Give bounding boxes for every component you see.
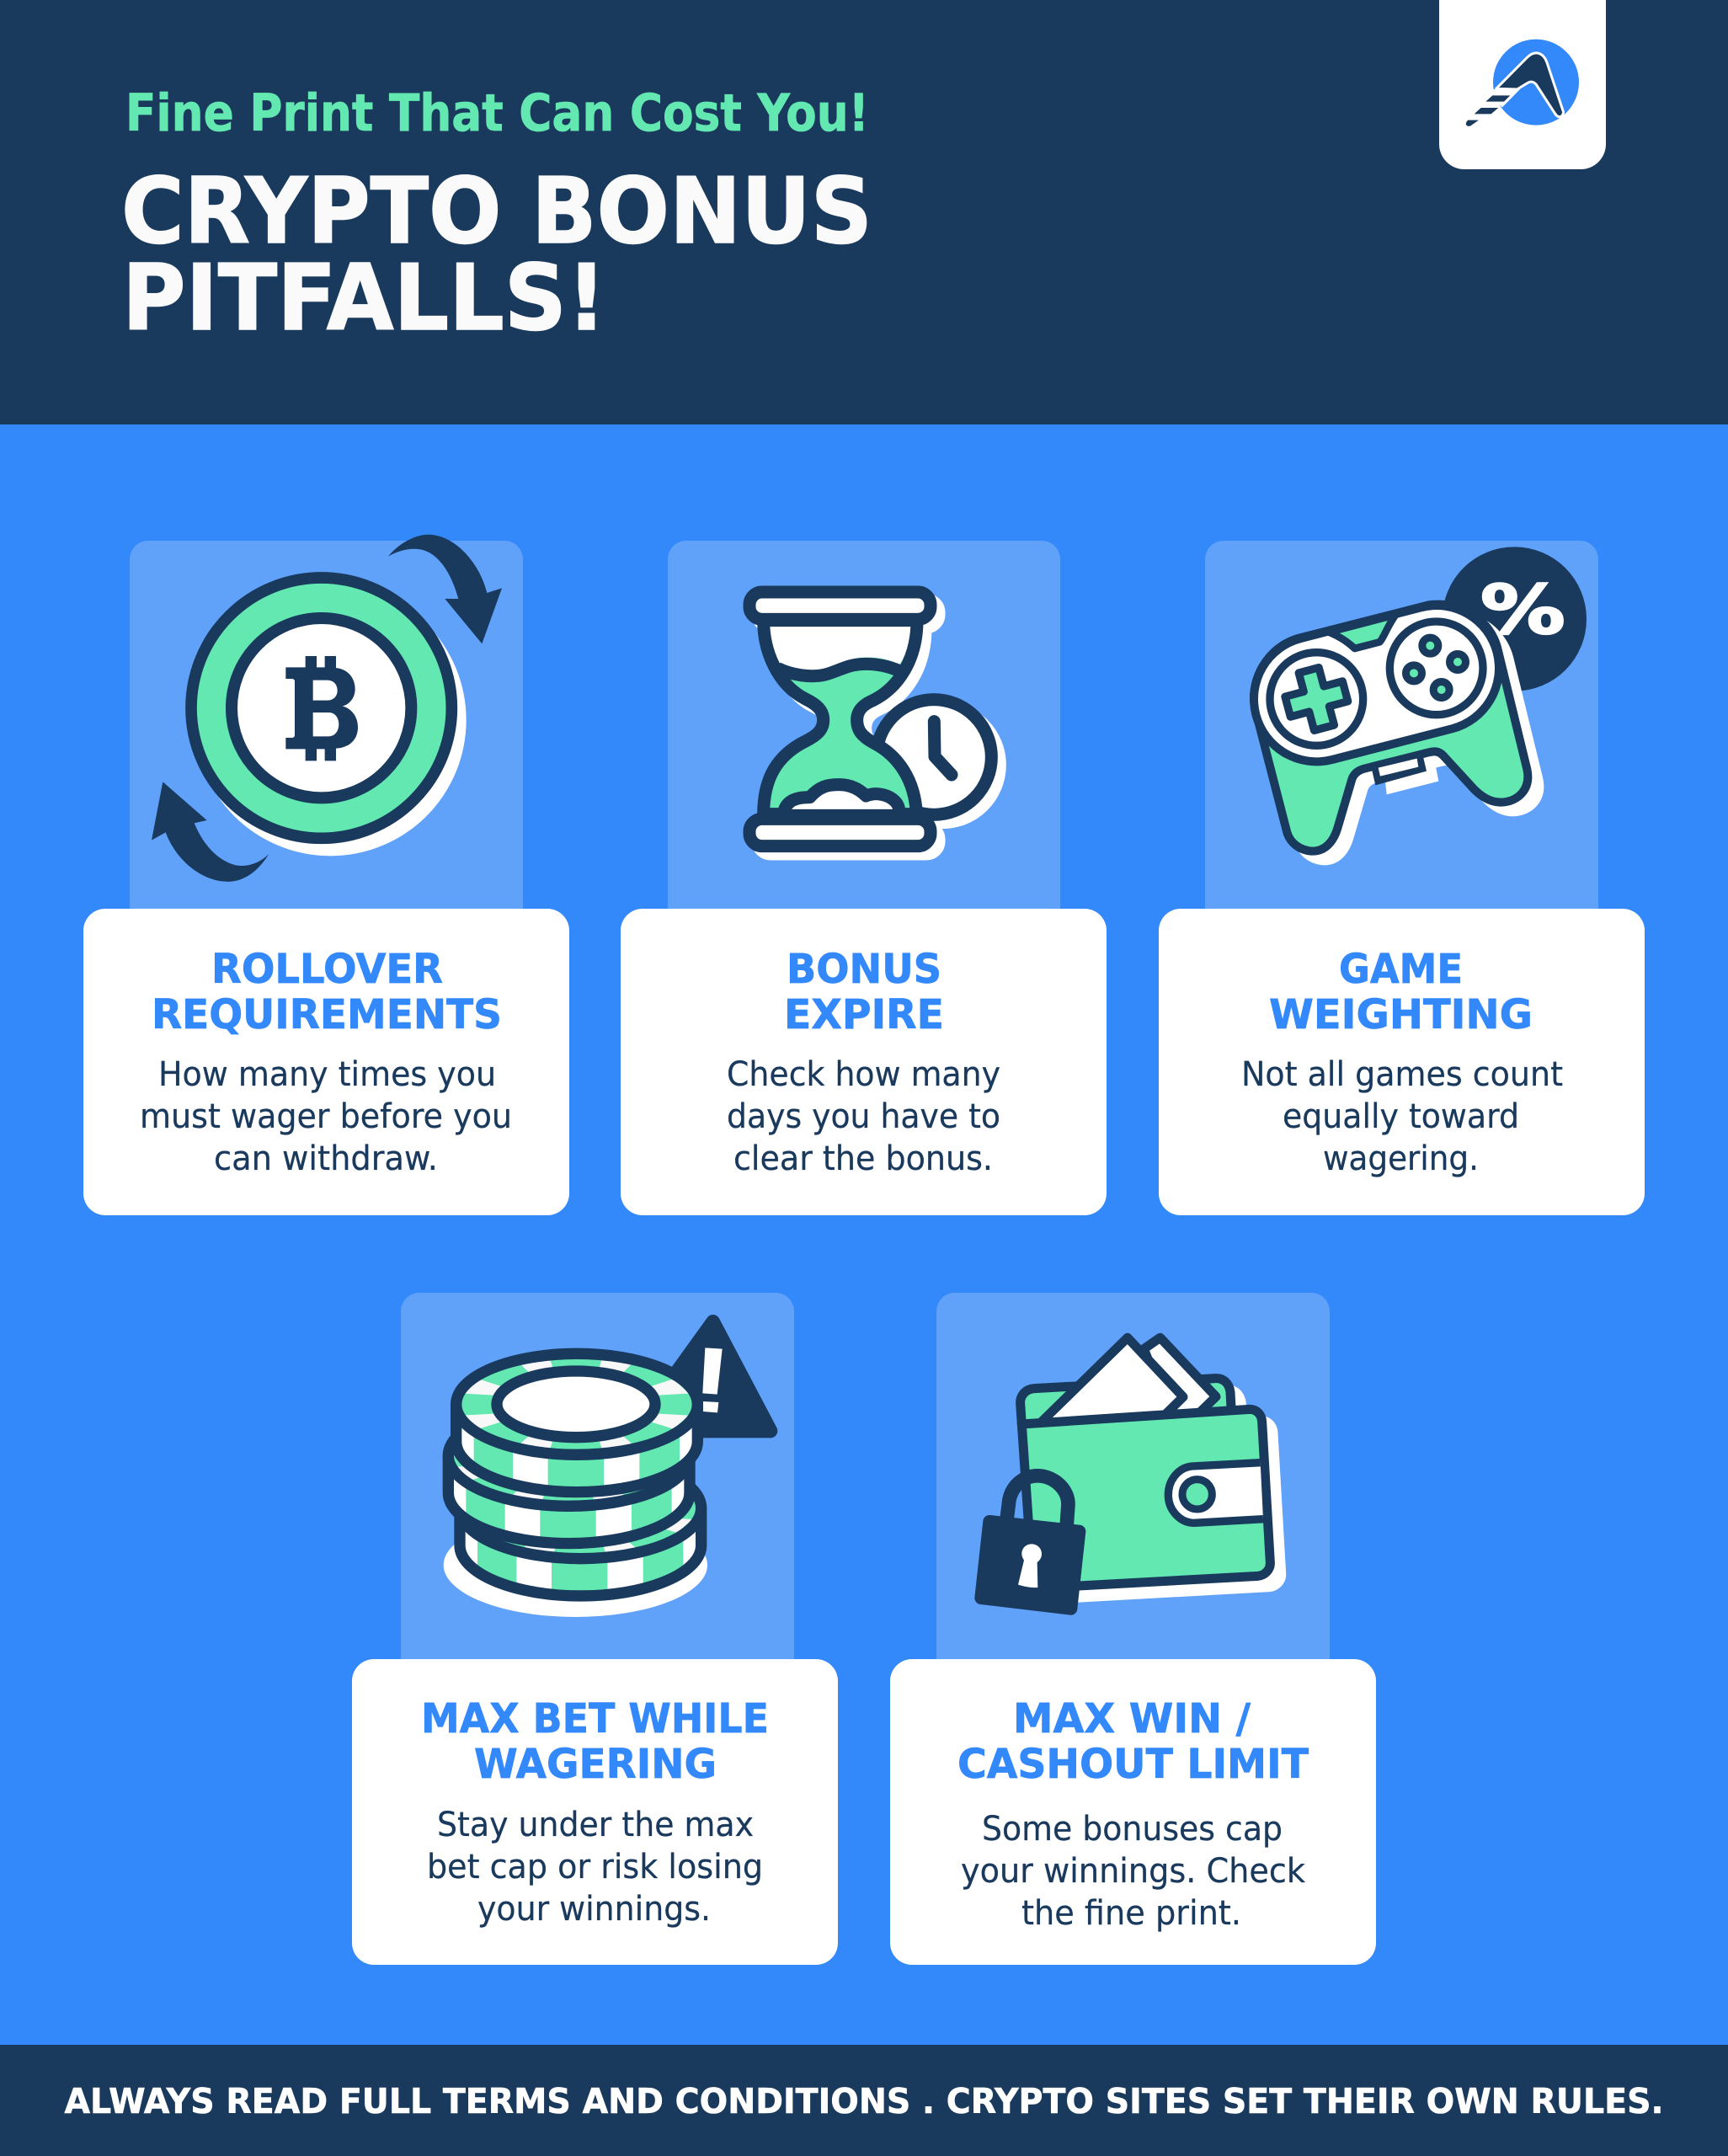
panel: max win cashout limit xyxy=(890,1293,1376,1965)
description: How many times you xyxy=(158,1055,496,1094)
heading: CASHOUT LIMIT xyxy=(957,1741,1309,1788)
text card xyxy=(890,1659,1376,1965)
text card xyxy=(621,909,1107,1215)
description xyxy=(961,1810,1306,1933)
text card xyxy=(83,909,569,1215)
description xyxy=(140,1055,512,1178)
heading xyxy=(152,946,502,1038)
icon: game controller with percent badge: % xyxy=(1480,571,1565,650)
description: bet cap or risk losing xyxy=(427,1848,763,1886)
description xyxy=(1241,1055,1563,1178)
heading xyxy=(421,1695,769,1788)
panel: rollover requirements xyxy=(83,535,569,1215)
heading: BONUS xyxy=(787,946,941,993)
description: can withdraw. xyxy=(214,1139,438,1178)
description: your winnings. Check xyxy=(961,1852,1306,1891)
title: PITFALLS! xyxy=(122,246,606,351)
title: CRYPTO BONUS xyxy=(121,159,872,264)
image tile xyxy=(401,1293,794,1676)
heading: REQUIREMENTS xyxy=(152,991,502,1038)
description: clear the bonus. xyxy=(733,1139,993,1178)
description: your winnings. xyxy=(477,1890,711,1929)
description: the fine print. xyxy=(1021,1894,1241,1933)
subtitle: Fine Print That Can Cost You! xyxy=(125,83,869,143)
description: must wager before you xyxy=(140,1097,512,1136)
text card xyxy=(1159,909,1645,1215)
icon: hourglass with clock xyxy=(749,592,1000,854)
panel: game weighting xyxy=(1159,541,1645,1215)
image tile xyxy=(668,541,1060,926)
heading: ROLLOVER xyxy=(211,946,443,993)
icon: game controller with percent badge xyxy=(1254,547,1587,861)
heading xyxy=(957,1695,1309,1788)
heading: EXPIRE xyxy=(784,991,944,1038)
icon: logo mark xyxy=(1466,40,1579,126)
heading xyxy=(1269,946,1533,1038)
description: Stay under the max xyxy=(437,1806,754,1844)
heading: WAGERING xyxy=(474,1741,717,1788)
description: equally toward xyxy=(1283,1097,1519,1136)
heading xyxy=(784,946,944,1038)
footer band xyxy=(0,2045,1728,2156)
heading: GAME xyxy=(1339,946,1463,993)
description xyxy=(727,1055,1000,1178)
logo badge xyxy=(1439,0,1606,169)
panel: max bet while wagering xyxy=(352,1293,838,1965)
description: days you have to xyxy=(727,1097,1000,1136)
image tile xyxy=(1205,541,1598,926)
icon: casino chip stack with warning xyxy=(444,1321,771,1620)
description: Not all games count xyxy=(1241,1055,1563,1094)
heading: WEIGHTING xyxy=(1269,991,1533,1038)
description: Check how many xyxy=(727,1055,1000,1094)
description: Some bonuses cap xyxy=(982,1810,1283,1849)
image tile xyxy=(130,541,523,926)
heading: MAX WIN / xyxy=(1013,1695,1251,1742)
heading: MAX BET WHILE xyxy=(421,1695,769,1742)
description xyxy=(427,1806,763,1929)
title xyxy=(121,159,872,351)
description: wagering. xyxy=(1323,1139,1479,1178)
icon: wallet with padlock xyxy=(981,1337,1282,1609)
panel: bonus expire xyxy=(621,541,1107,1215)
icon: bitcoin coin with arrows xyxy=(152,535,502,882)
text card xyxy=(352,1659,838,1965)
image tile xyxy=(936,1293,1330,1676)
footer disclaimer: ALWAYS READ FULL TERMS AND CONDITIONS . CRYPTO SITES SET THEIR OWN RULES. xyxy=(64,2081,1664,2121)
